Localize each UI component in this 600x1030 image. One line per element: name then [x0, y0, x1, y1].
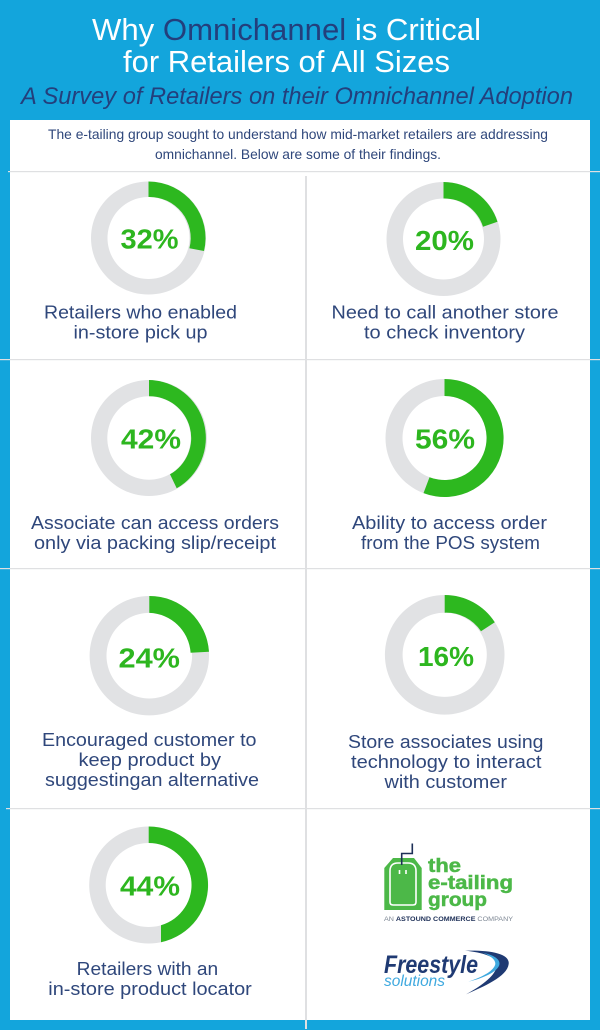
label	[42, 729, 259, 790]
label	[348, 731, 544, 792]
label	[332, 302, 558, 342]
label: from the POS system	[361, 532, 540, 553]
label	[44, 302, 237, 342]
label	[352, 512, 547, 553]
label	[31, 512, 279, 553]
label: Need to call another store	[332, 302, 558, 322]
icon: price tag mouse	[384, 844, 422, 910]
wordmark	[428, 856, 513, 911]
subtitle: A Survey of Retailers on their Omnichannel Adoption	[19, 83, 573, 110]
percentage: 24%	[118, 642, 180, 674]
percentage: 44%	[120, 870, 180, 902]
label: only via packing slip/receipt	[34, 532, 276, 553]
label: with customer	[383, 771, 507, 792]
percentage: 42%	[121, 424, 181, 454]
intro text: omnichannel. Below are some of their findings.	[155, 146, 441, 162]
logo: Freestyle solutions: solutions	[384, 973, 445, 990]
label: Ability to access order	[352, 512, 547, 533]
panel: 32% in-store pick up	[44, 182, 237, 342]
title: for Retailers of All Sizes	[123, 44, 450, 79]
label: in-store pick up	[74, 322, 208, 342]
donut chart: 16%	[385, 595, 505, 715]
donut chart: 20%	[387, 182, 501, 296]
donut chart: 42%	[91, 380, 207, 496]
percentage: 16%	[418, 641, 474, 672]
percentage: 32%	[120, 224, 179, 254]
label: Retailers with an	[77, 958, 218, 979]
label: Associate can access orders	[31, 512, 279, 533]
wordmark: the	[428, 856, 461, 877]
label: to check inventory	[364, 322, 526, 342]
panel: 42% orders via packing slip	[31, 380, 279, 553]
wordmark: group	[428, 890, 487, 911]
panel: 20% call another store	[332, 182, 558, 342]
donut chart: 24%	[90, 596, 209, 715]
donut chart: 56%	[386, 379, 504, 497]
label: suggestingan alternative	[45, 769, 259, 790]
label: Store associates using	[348, 731, 544, 752]
wordmark: e-tailing	[428, 873, 513, 894]
label: keep product by	[78, 749, 222, 770]
donut chart: 44%	[89, 826, 208, 944]
logo: Freestyle solutions	[384, 951, 509, 994]
label: technology to interact	[351, 751, 542, 772]
wordmark: Freestyle	[384, 951, 478, 979]
tagline: AN ASTOUND COMMERCE COMPANY	[384, 917, 513, 923]
icon: swoosh	[465, 951, 509, 994]
label	[48, 958, 252, 999]
title	[92, 12, 481, 79]
label: Retailers who enabled	[44, 302, 237, 322]
panel: 24% keep product	[42, 596, 259, 790]
label: Encouraged customer to	[42, 729, 256, 750]
panel: 56% access order from POS	[352, 379, 547, 553]
donut chart: 32%	[91, 182, 206, 294]
percentage: 20%	[415, 225, 474, 256]
intro text: The e-tailing group sought to understand how mid-market retailers are addressing	[48, 126, 548, 142]
panel: 16% technology with customer	[348, 595, 544, 792]
percentage: 56%	[415, 424, 475, 454]
title: Why Omnichannel is Critical	[92, 12, 481, 47]
label: in-store product locator	[48, 978, 252, 999]
panel: 44% product locator	[48, 826, 252, 999]
logo: the e-tailing group	[384, 844, 513, 923]
intro text	[48, 126, 548, 162]
